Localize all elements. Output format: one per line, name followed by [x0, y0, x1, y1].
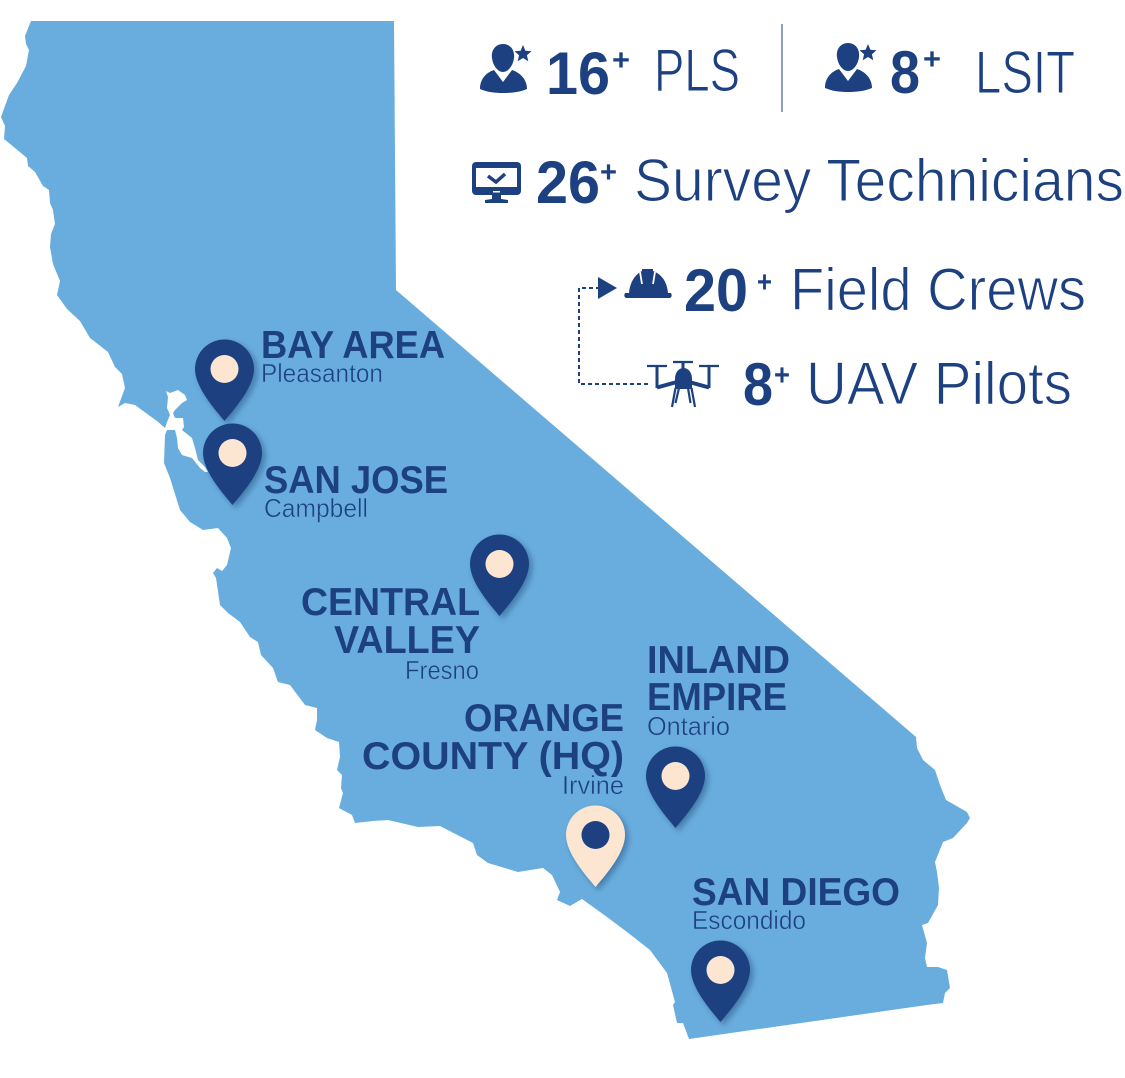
label: Central Valley: CENTRAL	[301, 581, 480, 624]
stat: 8+ LSIT: 8	[890, 39, 920, 106]
stat: 8+ LSIT	[890, 39, 1075, 106]
label: San Jose: Campbell	[264, 493, 368, 523]
stat: 26+ Survey Technicians: 26	[536, 149, 600, 216]
arrow: dotted connector from drone to hard hat	[579, 277, 648, 384]
stat: 20+ Field Crews: +	[757, 266, 772, 299]
stat: 8+ LSIT: +	[923, 43, 941, 76]
label: Bay Area	[261, 324, 445, 388]
label: Inland Empire	[647, 639, 790, 741]
stats: licensed staff row	[480, 24, 1075, 112]
icon: drone	[647, 362, 719, 407]
stat: 16+ PLS: +	[612, 44, 630, 77]
stat: 8+ LSIT: LSIT	[975, 39, 1075, 106]
label: Inland Empire: EMPIRE	[647, 676, 787, 719]
icon: monitor with check	[472, 162, 521, 203]
icon: person with star (LSIT)	[825, 43, 876, 92]
label: San Diego: SAN DIEGO	[692, 871, 900, 914]
label: Inland Empire: INLAND	[647, 639, 790, 682]
label: Bay Area: Pleasanton	[261, 358, 383, 388]
label: Bay Area: BAY AREA	[261, 324, 445, 367]
divider	[781, 24, 783, 112]
label: San Diego	[692, 871, 900, 935]
stat: 16+ PLS	[546, 37, 740, 107]
stat: 26+ Survey Technicians: +	[600, 156, 617, 189]
label: San Jose	[264, 459, 448, 523]
label: Orange County HQ: Irvine	[562, 770, 624, 800]
label: Central Valley	[301, 581, 480, 685]
stat: 16+ PLS: 16	[546, 40, 610, 107]
label: Central Valley: VALLEY	[334, 619, 480, 662]
icon: hard hat	[624, 269, 672, 298]
stat: 20+ Field Crews: Field Crews	[790, 256, 1086, 323]
stat: 8+ UAV Pilots: +	[774, 359, 790, 392]
icon: person with star (PLS)	[480, 44, 532, 93]
label: Orange County HQ: ORANGE	[464, 697, 624, 740]
stat row: UAV pilots	[647, 350, 1072, 418]
label: Orange County HQ: COUNTY (HQ)	[362, 735, 624, 778]
label: Inland Empire: Ontario	[647, 711, 730, 741]
stat: 20+ Field Crews	[684, 256, 1086, 324]
label: Central Valley: Fresno	[405, 655, 479, 685]
stat: 8+ UAV Pilots: UAV Pilots	[806, 350, 1072, 417]
stat row: field crews	[579, 256, 1086, 384]
pin: Orange County HQ	[566, 806, 625, 887]
stat: 16+ PLS: PLS	[654, 37, 740, 104]
pin: San Diego	[691, 940, 750, 1022]
pin: Inland Empire	[646, 746, 705, 828]
label: San Jose: SAN JOSE	[264, 459, 448, 502]
label: Orange County HQ	[362, 697, 624, 800]
pin: Central Valley	[470, 534, 529, 616]
pin: Bay Area	[195, 340, 254, 421]
label: San Diego: Escondido	[692, 905, 806, 935]
stat: 20+ Field Crews: 20	[684, 257, 748, 324]
stat row: survey technicians	[472, 147, 1124, 216]
pin: San Jose	[203, 424, 262, 505]
stat: 8+ UAV Pilots: 8	[743, 351, 773, 418]
